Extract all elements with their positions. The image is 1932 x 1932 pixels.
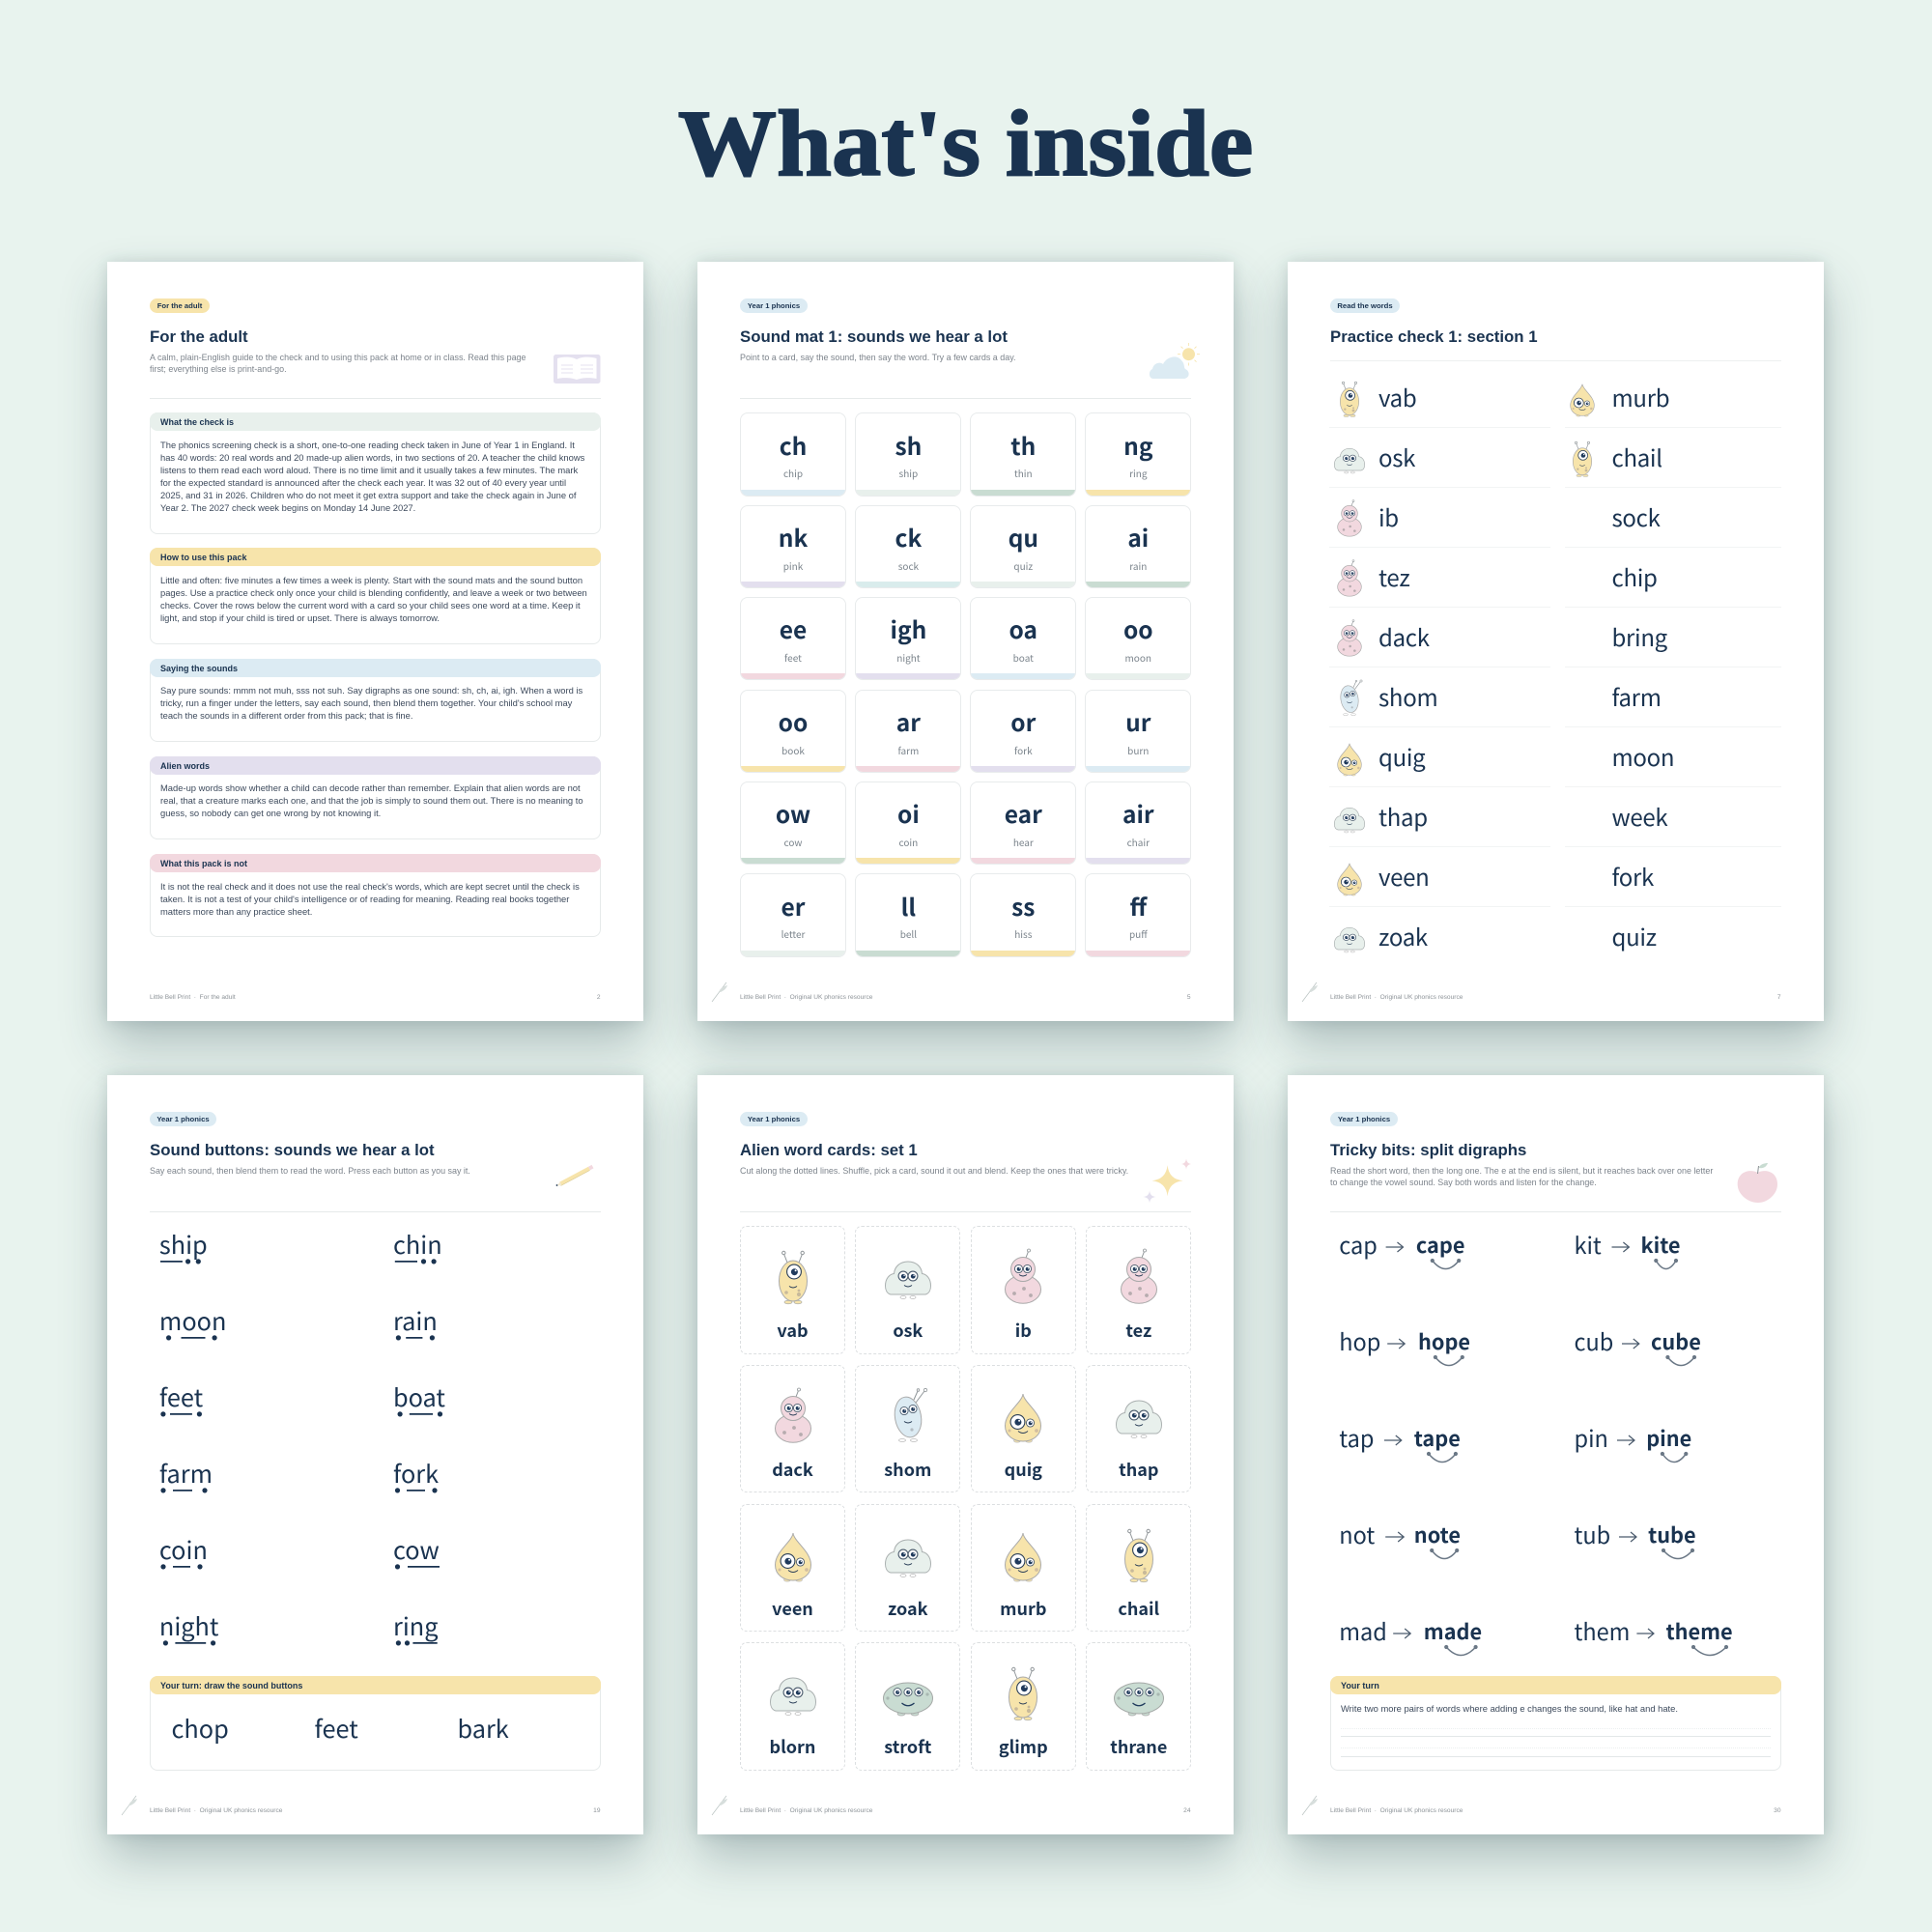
page heading: Alien word cards: set 1 [740, 1141, 918, 1159]
word: tez: tez [1378, 559, 1409, 593]
icon: pencil [556, 1165, 593, 1186]
panel text: Little and often: five minutes a few times a week is plenty. Start with the sound mats and the sound button [160, 575, 582, 585]
sound card: qu: qu [1009, 521, 1038, 554]
word: chip: chip [1611, 559, 1658, 593]
panel text [160, 782, 583, 818]
panel text: 2025, and 31 in 2026. Children who do not meet it get extra support and take the check again in June of [160, 490, 576, 500]
panel text [160, 575, 587, 623]
word pair: cap to cape: cape [1416, 1230, 1464, 1260]
word: vab: vab [1378, 380, 1416, 413]
icon: quill [711, 981, 727, 1003]
icon: sparkles [1144, 1159, 1190, 1202]
word with sound buttons: boat: boat [393, 1379, 445, 1414]
panel heading [150, 854, 601, 872]
panel text: guess, so nobody can get one wrong by not knowing it. [160, 808, 381, 818]
panel text [160, 685, 582, 721]
word with sound buttons: ship: ship [159, 1227, 208, 1262]
word: chail: chail [1611, 440, 1662, 473]
icon: apple [1737, 1163, 1777, 1203]
word pair: tap to tape: tap [1339, 1421, 1374, 1454]
word pair: cub to cube: cub [1575, 1324, 1613, 1357]
page heading: Practice check 1: section 1 [1330, 327, 1538, 346]
panel text [160, 439, 584, 513]
panel heading: Your turn: draw the sound buttons [160, 1681, 302, 1690]
sound card: ur: ur [1125, 705, 1151, 739]
sound card: qu [970, 505, 1076, 588]
footer text: Little Bell Print · Original UK phonics resource [1330, 1806, 1463, 1814]
panel: what the check is [150, 412, 601, 534]
word pair: mad to made: mad [1339, 1614, 1387, 1647]
footer text: Little Bell Print · Original UK phonics resource [1330, 993, 1463, 1001]
icon: open book [554, 355, 601, 384]
word pair: pin to pine [1575, 1421, 1777, 1469]
sound card: oo: moon [1125, 650, 1151, 665]
panel: sound buttons page [108, 1076, 641, 1833]
panel heading: What this pack is not [160, 859, 247, 868]
alien card: dack: dack [772, 1457, 813, 1482]
alien card: blorn [740, 1642, 845, 1771]
page number: 7 [1777, 993, 1781, 1001]
panel: for the adult page [108, 263, 641, 1020]
page intro text: to change the vowel sound. Say both words and listen for the change. [1330, 1178, 1597, 1187]
sound card: sh: sh [895, 429, 922, 463]
word pair: tub to tube: tube [1648, 1520, 1696, 1549]
icon: alien tez [1337, 559, 1362, 597]
panel: alien word cards page [697, 1076, 1233, 1833]
tag pill [1330, 1112, 1398, 1126]
panel text: pages. Use a practice check only once your child is blending confidently, and leave a week or two between [160, 587, 587, 598]
alien card: tez: tez [1125, 1318, 1151, 1343]
word: moon: moon [1611, 739, 1674, 773]
panel text: Year 2. The 2027 check week begins on Monday 14 June 2027. [160, 502, 415, 513]
word: bring: bring [1611, 619, 1667, 653]
icon: alien vab [1340, 381, 1359, 417]
sound card: th [970, 412, 1076, 497]
sound card: ss: ss [1011, 890, 1035, 923]
icon: cloud and sun [1150, 343, 1200, 379]
word with sound buttons: coin: coin [159, 1532, 208, 1567]
sound card: air [1085, 781, 1191, 865]
sound card: igh: night [896, 650, 921, 665]
word with sound buttons: moon: moon [159, 1303, 226, 1338]
sound card: ee: ee [780, 612, 807, 646]
alien card: glimp: glimp [999, 1734, 1048, 1759]
icon: alien osk [1334, 448, 1365, 473]
alien card: ib [971, 1226, 1076, 1354]
sound card: ng [1085, 412, 1191, 497]
panel: your turn [1330, 1676, 1781, 1771]
alien card: vab: vab [777, 1318, 809, 1343]
sound card: ll: bell [900, 926, 917, 941]
alien card: veen [740, 1503, 845, 1632]
alien card: thap [1086, 1365, 1191, 1492]
sound card: sh: ship [899, 466, 918, 480]
alien card: blorn: blorn [770, 1734, 815, 1759]
panel heading [150, 412, 601, 431]
sound card: sh [855, 412, 961, 497]
sound card: ar: farm [897, 742, 919, 757]
word: quiz: quiz [1611, 919, 1657, 952]
icon: quill [711, 1795, 727, 1816]
sound card: oo book [740, 690, 846, 773]
sound card: ch: chip [783, 466, 803, 480]
sound card: th: thin [1014, 466, 1033, 480]
word with sound buttons: cow: cow [393, 1532, 440, 1567]
panel heading [150, 1676, 601, 1694]
tag pill: Year 1 phonics [748, 1115, 800, 1123]
sound card: ng: ng [1123, 429, 1152, 463]
page intro text: Cut along the dotted lines. Shuffle, pick a card, sound it out and blend. Keep the ones that were tricky. [740, 1166, 1128, 1176]
practice word: feet: feet [315, 1711, 358, 1746]
word with sound buttons: fork: fork [393, 1456, 439, 1491]
panel heading: Your turn [1341, 1681, 1379, 1690]
word pair: tap to tape [1339, 1421, 1542, 1469]
panel text: Say pure sounds: mmm not muh, sss not suh. Say digraphs as one sound: sh, ch, ai, igh. When a word is [160, 685, 582, 696]
sound card: ck: sock [898, 558, 919, 573]
sound card: ch [740, 412, 846, 497]
panel text: listens to them read each word aloud. There is no time limit and it usually takes a few minutes. The mark [160, 465, 578, 475]
sound card: ff [1085, 873, 1191, 957]
panel text: real, that a creature marks each one, and that the job is simply to sound them out. There is no meaning to [160, 795, 583, 806]
sound card: ng: ring [1129, 466, 1147, 480]
panel text: taken. It is not a test of your child's intelligence or of reading for meaning. Reading real books together [160, 894, 569, 904]
icon: alien veen [1337, 864, 1362, 896]
panel: split digraphs page [1289, 1076, 1822, 1833]
alien card: quig [971, 1365, 1076, 1492]
sound card: ll [855, 873, 961, 957]
icon: alien dack [1337, 619, 1362, 657]
page intro text: Say each sound, then blend them to read the word. Press each button as you say it. [150, 1166, 470, 1176]
panel heading [150, 659, 601, 677]
word pair: tap to tape: tape [1414, 1423, 1461, 1453]
sound card: ear: ear [1005, 797, 1042, 831]
panel: sound mat page [697, 263, 1233, 1020]
word pair: mad to made [1339, 1614, 1542, 1662]
sound card: qu: quiz [1013, 558, 1033, 573]
alien card: thap: thap [1119, 1457, 1158, 1482]
tag pill [740, 1112, 808, 1126]
icon: quill [1300, 1794, 1320, 1816]
word pair: cap to cape [1339, 1228, 1542, 1276]
sound card: nk: pink [783, 558, 803, 573]
alien card: zoak: zoak [888, 1596, 928, 1621]
word pair: cub to cube: cube [1651, 1326, 1701, 1356]
sound card: ck [855, 505, 961, 588]
sound card: ll: ll [901, 890, 916, 923]
sound card: air: chair [1127, 835, 1150, 849]
sound card: nk [740, 505, 846, 588]
alien card: osk [855, 1226, 960, 1354]
icon: alien thap [1334, 808, 1365, 833]
sound card: air: air [1122, 797, 1154, 831]
tag pill [150, 298, 210, 313]
sound card: oo book: book [781, 742, 805, 757]
sound card: or: fork [1014, 742, 1033, 757]
panel heading [1330, 1676, 1781, 1694]
sound card: ear: hear [1013, 835, 1034, 849]
word with sound buttons: chin: chin [393, 1227, 442, 1262]
word pair: tub to tube [1575, 1518, 1777, 1566]
sound card: nk: nk [779, 521, 808, 554]
page intro text [150, 353, 526, 374]
icon: alien murb [1570, 384, 1595, 417]
page number: 5 [1187, 993, 1190, 1001]
alien card: thrane: thrane [1110, 1734, 1167, 1759]
word pair: hop to hope: hope [1418, 1326, 1470, 1356]
sound card: ck: ck [895, 521, 922, 554]
panel: saying the sounds [150, 659, 601, 742]
sound card: ar: ar [896, 705, 921, 739]
footer text: Little Bell Print · Original UK phonics resource [740, 993, 872, 1001]
sound card: oo: oo [1123, 612, 1153, 646]
alien card: stroft [855, 1642, 960, 1771]
sound card: th: th [1010, 429, 1036, 463]
icon: alien shom [1341, 680, 1362, 716]
alien card: shom [855, 1365, 960, 1492]
word pair: mad to made: made [1424, 1616, 1482, 1646]
word with sound buttons: night: night [159, 1608, 218, 1643]
panel text: It is not the real check and it does not use the real check's words, which are kept secret until the check is [160, 881, 580, 891]
alien card: osk: osk [893, 1318, 923, 1343]
word: dack: dack [1378, 619, 1430, 653]
icon: alien chail [1573, 440, 1592, 477]
icon: alien quig [1337, 744, 1362, 777]
icon: quill [1302, 981, 1318, 1003]
page intro text [1330, 1166, 1714, 1187]
sound card: ff: puff [1129, 926, 1148, 941]
tag pill [740, 298, 808, 313]
footer text: Little Bell Print · Original UK phonics resource [150, 1806, 282, 1814]
word with sound buttons: rain: rain [393, 1303, 438, 1338]
tag pill [1330, 298, 1400, 313]
sound card: ff: ff [1129, 890, 1147, 923]
sound card: oi: coin [898, 835, 918, 849]
sound card: or: or [1010, 705, 1036, 739]
sound card: ss [970, 873, 1076, 957]
panel heading [150, 548, 601, 566]
page number: 24 [1183, 1806, 1190, 1814]
tag pill: Year 1 phonics [748, 301, 800, 310]
alien card: stroft: stroft [884, 1734, 931, 1759]
word pair: kit to kite [1575, 1228, 1777, 1276]
alien card: glimp [971, 1642, 1076, 1771]
panel text: has 40 words: 20 real words and 20 made-up alien words, in two sections of 20. A teacher the child knows [160, 452, 584, 463]
sound card: oi [855, 781, 961, 865]
alien card: tez [1086, 1226, 1191, 1354]
alien card: thrane [1086, 1642, 1191, 1771]
tag pill [150, 1112, 216, 1126]
panel: how to use this pack [150, 548, 601, 644]
word: week: week [1611, 799, 1667, 833]
word pair: tub to tube: tub [1575, 1518, 1610, 1550]
alien card: chail: chail [1118, 1596, 1159, 1621]
sound card: ai: rain [1129, 558, 1147, 573]
panel text: Write two more pairs of words where adding e changes the sound, like hat and hate. [1341, 1702, 1678, 1714]
sound card: oa: oa [1009, 612, 1037, 646]
sound card: ur [1085, 690, 1191, 773]
word with sound buttons: farm: farm [159, 1456, 213, 1491]
panel: your turn [150, 1676, 601, 1771]
alien card: vab [740, 1226, 845, 1354]
panel text: for the expected standard is announced after the check each year. It was 32 out of 40 every year until [160, 477, 566, 488]
alien card: murb [971, 1503, 1076, 1632]
page heading: Sound buttons: sounds we hear a lot [150, 1141, 435, 1159]
page number: 2 [597, 993, 601, 1001]
sound card: oa [970, 597, 1076, 680]
panel: practice check page [1289, 263, 1822, 1020]
page heading: Sound mat 1: sounds we hear a lot [740, 327, 1008, 346]
word pair: not to note: not [1339, 1518, 1375, 1550]
icon: quill [122, 1795, 137, 1816]
sound card: ee: feet [784, 650, 802, 665]
alien card: chail [1086, 1503, 1191, 1632]
panel text: matters more than any practice sheet. [160, 906, 312, 917]
sound card: er: letter [781, 926, 805, 941]
word: quig: quig [1378, 739, 1425, 773]
page heading: For the adult [150, 327, 248, 346]
sound card: ch: ch [780, 429, 807, 463]
panel text: The phonics screening check is a short, one-to-one reading check taken in June of Year 1 in England. It [160, 439, 575, 450]
sound card: ow [740, 781, 846, 865]
word: shom: shom [1378, 679, 1437, 713]
word pair: not to note [1339, 1518, 1542, 1566]
word: fork: fork [1611, 859, 1654, 893]
alien card: murb: murb [1000, 1596, 1046, 1621]
word pair: them to theme: theme [1665, 1616, 1733, 1646]
panel heading: How to use this pack [160, 553, 247, 562]
panel heading: What the check is [160, 417, 234, 427]
sound card: or [970, 690, 1076, 773]
word pair: cap to cape: cap [1339, 1228, 1378, 1261]
panel heading: Alien words [160, 761, 210, 771]
word pair: not to note: note [1414, 1520, 1461, 1549]
alien card: veen: veen [772, 1596, 813, 1621]
word pair: pin to pine: pine [1646, 1423, 1691, 1453]
word pair: hop to hope: hop [1339, 1324, 1380, 1357]
sound card: ar [855, 690, 961, 773]
page intro text: Read the short word, then the long one. The e at the end is silent, but it reaches back over one letter [1330, 1166, 1713, 1176]
sound card: oo [1085, 597, 1191, 680]
alien card: zoak [855, 1503, 960, 1632]
word: murb: murb [1611, 380, 1669, 413]
footer text: Little Bell Print · For the adult [150, 993, 236, 1001]
icon: alien zoak [1334, 927, 1365, 952]
panel text: tricky, run a finger under the letters, say each sound, then blend them together. Your child's school may [160, 697, 572, 708]
panel: alien words [150, 756, 601, 839]
page number: 19 [593, 1806, 601, 1814]
sound card: ow: cow [784, 835, 802, 849]
footer text: Little Bell Print · Original UK phonics resource [740, 1806, 872, 1814]
sound card: oi: oi [897, 797, 920, 831]
sound card: ee [740, 597, 846, 680]
word: veen: veen [1378, 859, 1429, 893]
page heading: Tricky bits: split digraphs [1330, 1141, 1526, 1159]
word pair: kit to kite: kit [1575, 1228, 1602, 1261]
page intro text: Point to a card, say the sound, then say the word. Try a few cards a day. [740, 353, 1016, 362]
panel text [160, 881, 580, 917]
sound card: ur: burn [1127, 742, 1149, 757]
tag pill: Year 1 phonics [1338, 1115, 1390, 1123]
word: osk: osk [1378, 440, 1415, 473]
word pair: pin to pine: pin [1575, 1421, 1608, 1454]
sound card: ai: ai [1127, 521, 1149, 554]
panel text: checks. Cover the rows below the current word with a card so your child sees one word at a time. Keep it [160, 600, 581, 611]
practice word: bark: bark [458, 1711, 509, 1746]
word with sound buttons: ring: ring [393, 1608, 438, 1643]
sound card: oa: boat [1013, 650, 1034, 665]
icon: alien ib [1337, 499, 1362, 537]
word: farm: farm [1611, 679, 1662, 713]
tag pill: Read the words [1337, 301, 1393, 310]
page intro text: first; everything else is print-and-go. [150, 364, 287, 374]
word pair: cub to cube [1575, 1324, 1777, 1373]
word: thap: thap [1378, 799, 1428, 833]
sound card: er [740, 873, 846, 957]
panel text: Made-up words show whether a child can decode rather than remember. Explain that alien words are not [160, 782, 581, 793]
tag pill: Year 1 phonics [156, 1115, 210, 1123]
panel heading [150, 756, 601, 775]
word: zoak: zoak [1378, 919, 1428, 952]
panel text: teach the sounds in a different order from this pack; that is fine. [160, 710, 412, 721]
panel: what this pack is not [150, 854, 601, 937]
tag pill: For the adult [157, 301, 202, 310]
word pair: them to theme: them [1575, 1614, 1630, 1647]
word pair: them to theme [1575, 1614, 1777, 1662]
word pair: hop to hope [1339, 1324, 1542, 1373]
title: What's inside [678, 92, 1254, 195]
word: sock: sock [1611, 499, 1661, 533]
sound card: ear [970, 781, 1076, 865]
panel heading: Saying the sounds [160, 664, 238, 673]
page intro text: A calm, plain-English guide to the check and to using this pack at home or in class. Read this page [150, 353, 526, 362]
word pair: kit to kite: kite [1640, 1230, 1681, 1260]
alien card: shom: shom [884, 1457, 931, 1482]
sound card: igh: igh [891, 612, 926, 646]
sound card: ow: ow [776, 797, 810, 831]
sound card: ss: hiss [1014, 926, 1032, 941]
sound card: igh [855, 597, 961, 680]
practice word: chop: chop [172, 1711, 229, 1746]
sound card: ai [1085, 505, 1191, 588]
alien card: dack [740, 1365, 845, 1492]
alien card: ib: ib [1015, 1318, 1032, 1343]
word with sound buttons: feet: feet [159, 1379, 203, 1414]
page number: 30 [1774, 1806, 1781, 1814]
panel text: light, and stop if your child is tired or upset. There is always tomorrow. [160, 612, 440, 623]
alien card: quig: quig [1005, 1457, 1042, 1482]
word: ib: ib [1378, 499, 1399, 533]
sound card: oo book: oo [779, 705, 808, 739]
sound card: er: er [781, 890, 805, 923]
